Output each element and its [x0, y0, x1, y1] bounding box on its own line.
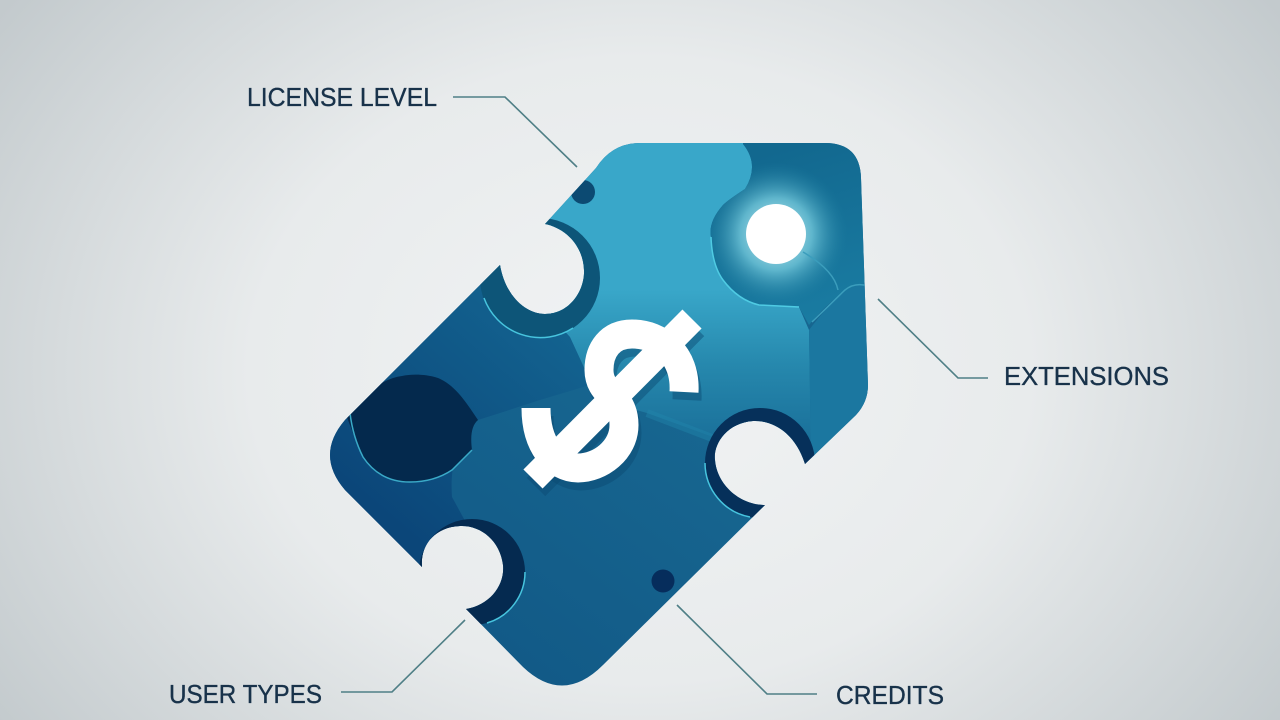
panel: top-right piece	[710, 143, 865, 325]
icon: glowing light	[746, 204, 806, 264]
icon: dollar sign	[533, 319, 692, 479]
panel: light top piece	[545, 143, 810, 456]
notch shadow: upper left	[480, 218, 600, 338]
blob edge line	[350, 413, 472, 482]
circuit line	[803, 252, 868, 322]
connector: license level	[453, 97, 577, 167]
glow around light	[714, 172, 837, 294]
label: user types: USER TYPES	[169, 679, 322, 709]
label: extensions: EXTENSIONS	[1004, 361, 1169, 391]
notch shadow: bottom	[419, 519, 525, 625]
connector: user types	[341, 620, 465, 692]
dot: lower	[652, 570, 674, 592]
connector: extensions	[878, 299, 988, 378]
label: license level: LICENSE LEVEL	[247, 82, 437, 112]
dot: upper	[571, 180, 595, 204]
notch edge: bottom	[487, 572, 525, 623]
tag base	[320, 130, 880, 700]
light band	[646, 413, 722, 444]
icon: dollar sign shadow	[536, 327, 695, 487]
label: credits: CREDITS	[836, 680, 944, 710]
notch edge: upper left	[484, 298, 573, 338]
notch shadow: right	[705, 408, 815, 518]
panel: left dark blue region	[330, 265, 556, 567]
panel: right lower piece	[809, 283, 868, 458]
navy blob	[345, 375, 478, 482]
connector: credits	[677, 605, 817, 694]
notch edge: right	[705, 463, 750, 517]
glow edge line	[711, 237, 799, 307]
puzzle price tag	[320, 130, 880, 700]
